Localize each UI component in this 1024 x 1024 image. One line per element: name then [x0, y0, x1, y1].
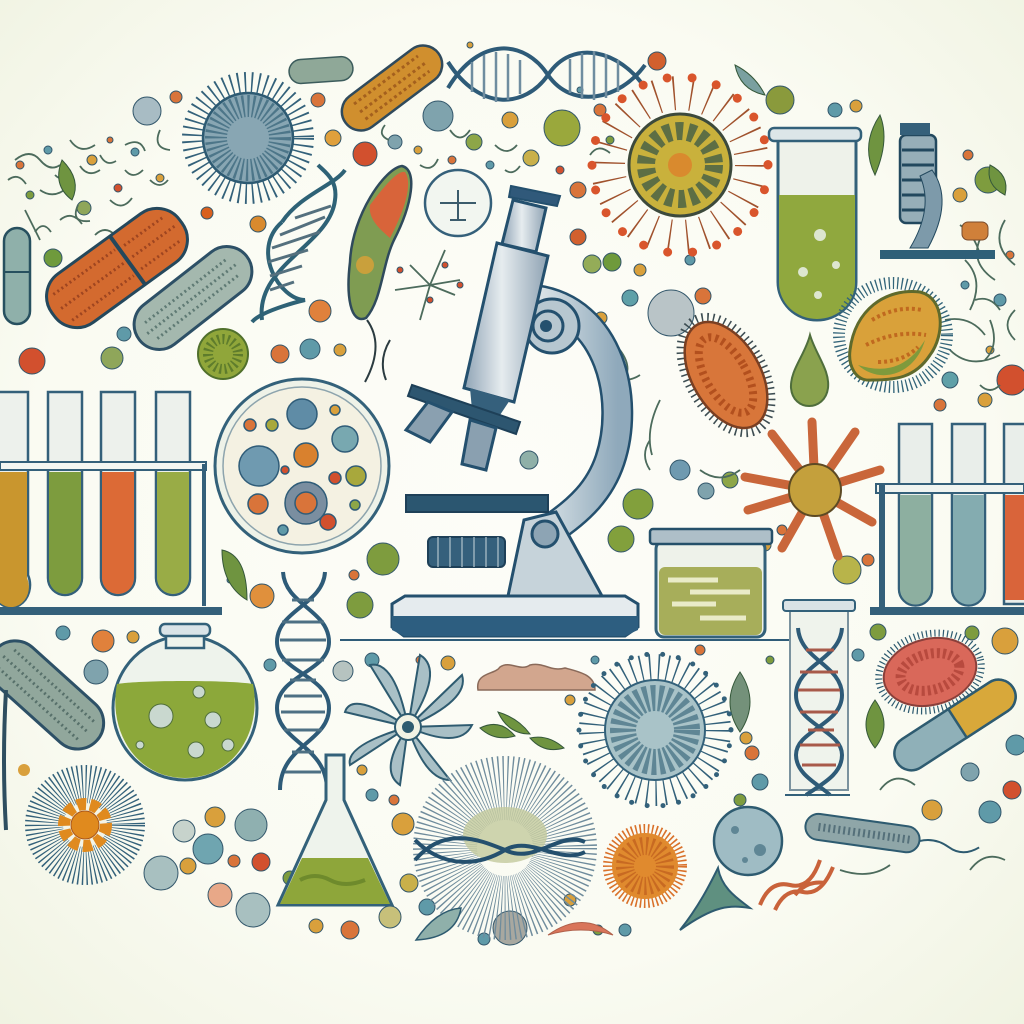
- spiky burst: bottom left: [47, 787, 123, 863]
- cell: green round left: [198, 329, 248, 379]
- bacterium: bottom left rod: [0, 630, 114, 760]
- cell: blue sphere: [714, 807, 782, 875]
- bacterium: orange-green vertical: [349, 166, 411, 382]
- DNA with burst: [415, 788, 585, 908]
- cell: orange burst: [609, 830, 681, 902]
- mini microscope top right: [880, 123, 995, 259]
- pill: orange left: [35, 197, 199, 339]
- leaf cluster: bottom: [416, 908, 613, 940]
- pink cloud organism: [478, 664, 595, 690]
- red squiggles: [760, 860, 833, 910]
- pill: orange top: [334, 38, 450, 138]
- rod: grey bottom right: [804, 812, 981, 862]
- microscope nosepiece: [408, 385, 520, 434]
- kidney bacterium with fringe: [839, 283, 947, 387]
- jar: green liquid: [650, 529, 772, 637]
- small leaves: [59, 65, 1006, 750]
- microscope arm: [535, 300, 617, 530]
- microscope objective left: [406, 402, 452, 442]
- petri dish: [215, 379, 389, 553]
- test tube rack: left: [0, 392, 222, 615]
- star organism: red-orange: [745, 422, 880, 556]
- virus: yellow with red spikes: [592, 77, 768, 253]
- microscope stage: [406, 495, 548, 512]
- left edge filament: [4, 690, 30, 830]
- scattered sketch marks: [8, 125, 1015, 874]
- test tube: top right: [769, 128, 861, 320]
- microscope objective right: [462, 420, 496, 470]
- virus: blue spiky bottom centre: [579, 654, 731, 806]
- microscope lower arm: [508, 512, 602, 596]
- DNA: vertical left: [277, 572, 329, 790]
- table line: [340, 639, 790, 641]
- virus: blue-grey top left: [194, 84, 302, 192]
- capsule: yellow and blue: [888, 673, 1022, 777]
- microscope base: [392, 596, 638, 636]
- droplet: green: [791, 335, 828, 406]
- test tube rack: right: [870, 424, 1024, 615]
- bacterium: red oval right: [870, 623, 990, 721]
- round flask: [113, 624, 257, 780]
- flower organism: [345, 655, 472, 785]
- conical flask: [278, 755, 392, 905]
- microscope focus knob upper: [525, 299, 579, 353]
- DNA: horizontal top: [448, 48, 645, 102]
- capsule: small grey left: [4, 228, 30, 324]
- bacterium: orange oval: [664, 303, 788, 447]
- green stalk organism: [680, 868, 750, 930]
- bacterium: green rod top: [288, 56, 354, 84]
- instrument dial: [425, 170, 491, 236]
- DNA: diagonal left: [252, 165, 345, 322]
- microscope: [340, 186, 790, 640]
- microscope stage knob: [428, 537, 505, 567]
- bacterium: grey-green rod left: [124, 236, 262, 360]
- tall beaker with DNA: [783, 600, 855, 795]
- microscope tube: [464, 243, 548, 402]
- microscope eyepiece: [502, 200, 546, 252]
